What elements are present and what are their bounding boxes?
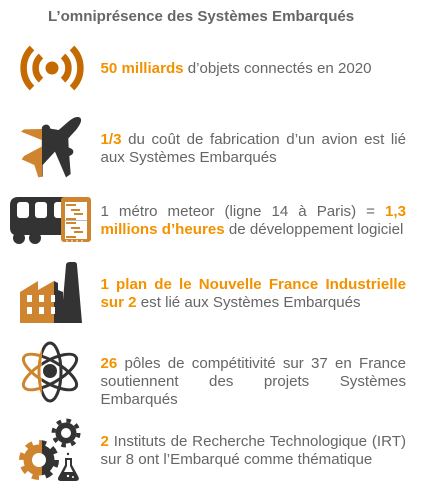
text: poles: 26 pôles de compétitivité sur 37 en France — [100, 355, 406, 372]
text: metro — [100, 203, 406, 238]
text: plan: sur 2 est lié aux Systèmes Embarqués — [100, 294, 361, 311]
text: poles — [100, 355, 406, 408]
text: plan: 1 plan de le Nouvelle France Industrielle — [100, 276, 406, 293]
text: metro: 1 métro meteor (ligne 14 à Paris) = 1,3 — [100, 203, 406, 220]
text: institutes — [100, 433, 406, 468]
text: metro: millions d’heures de développement logiciel — [100, 221, 403, 238]
text: poles: soutiennent des projets Systèmes — [100, 373, 406, 390]
text: institutes: 2 Instituts de Recherche Technologique (IRT) — [100, 433, 406, 450]
text: plane cost: aux Systèmes Embarqués — [100, 149, 277, 166]
title: L’omniprésence des Systèmes Embarqués — [48, 8, 354, 25]
text: plan — [100, 276, 406, 311]
text: poles: Embarqués — [100, 391, 178, 408]
icon: atom — [22, 342, 78, 402]
text: institutes: sur 8 ont l’Embarqué comme thématique — [100, 451, 372, 468]
text: plane cost: 1/3 du coût de fabrication d’un avion est lié — [100, 131, 406, 148]
text: plane cost — [100, 131, 406, 166]
icon: gears and flask — [19, 418, 80, 481]
text: objects: 50 milliards d’objets connectés en 2020 — [100, 60, 372, 77]
icon: plane — [21, 117, 82, 178]
